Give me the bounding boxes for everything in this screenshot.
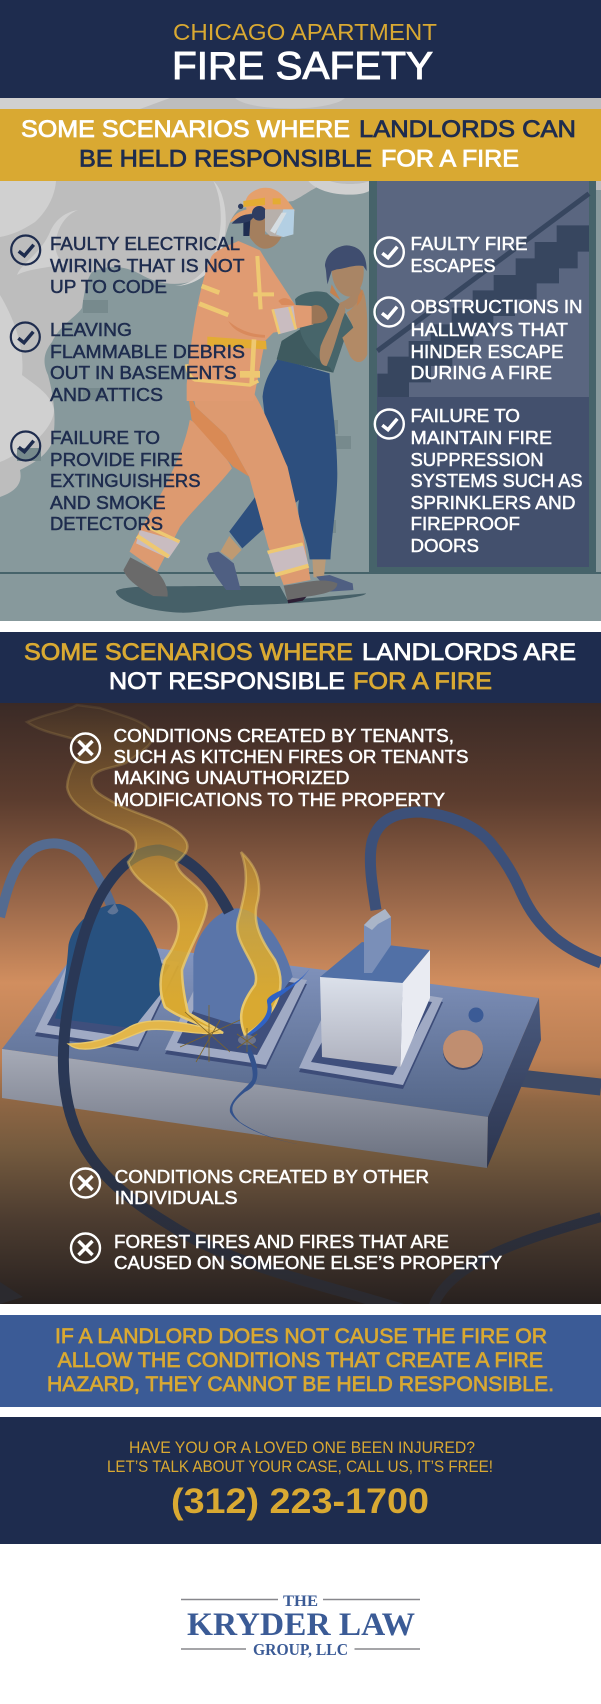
navy heading banner: SOME SCENARIOS WHERE: [24, 639, 353, 666]
gold heading banner: SOME SCENARIOS WHERE: [21, 116, 350, 143]
logo: The Kryder Law Group: THE: [283, 1593, 318, 1610]
figure: firefighter: [123, 188, 337, 603]
item: obstructions: [374, 296, 582, 383]
item: fire escapes: FAULTY FIRE: [410, 233, 528, 254]
item: extinguishers: FAILURE TO: [50, 427, 160, 448]
logo: The Kryder Law Group: [181, 1593, 420, 1659]
icon: x mark: [71, 1234, 100, 1262]
gold heading banner: FOR A FIRE: [381, 146, 519, 172]
stairs: [377, 194, 589, 397]
callout: blue conclusion band: IF A LANDLORD DOES NOT CAUSE THE FIRE OR: [55, 1325, 547, 1348]
item: obstructions: HINDER ESCAPE: [410, 341, 564, 362]
item: flammable debris: OUT IN BASEMENTS: [50, 362, 236, 383]
icon: check: [11, 236, 40, 264]
item: extinguishers: PROVIDE FIRE: [50, 449, 183, 470]
list item: tenant conditions: MAKING UNAUTHORIZED: [114, 767, 350, 788]
list item: other individuals: CONDITIONS CREATED BY OTHER: [115, 1166, 429, 1187]
navy heading banner: NOT RESPONSIBLE: [109, 668, 345, 695]
callout: blue conclusion band: [0, 1315, 601, 1407]
item: flammable debris: AND ATTICS: [50, 384, 163, 405]
list item: forest fires: CAUSED ON SOMEONE ELSE’S PROPERTY: [114, 1252, 502, 1273]
header panel: [0, 0, 601, 98]
item: suppression systems: SUPPRESSION: [410, 449, 544, 470]
panel: call to action: HAVE YOU OR A LOVED ONE BEEN INJURED?: [129, 1438, 475, 1457]
item: suppression systems: FIREPROOF: [410, 513, 520, 534]
power strip: [2, 939, 541, 1168]
item: obstructions: HALLWAYS THAT: [410, 319, 568, 340]
large black cord: [63, 850, 420, 1315]
figure: woman: [207, 245, 367, 592]
doorway panel: [369, 181, 596, 573]
icon: check: [374, 298, 404, 326]
right checklist: [374, 233, 582, 556]
item: faulty wiring: WIRING THAT IS NOT: [50, 255, 244, 276]
smoke wisps: [0, 181, 378, 462]
woman legs and shoes: [207, 358, 353, 592]
logo: The Kryder Law Group: GROUP, LLC: [253, 1640, 348, 1659]
indicator light: [468, 1008, 484, 1022]
power button: [443, 1030, 483, 1070]
wall bricks: [17, 300, 351, 533]
white plug: [320, 909, 430, 1067]
item: suppression systems: MAINTAIN FIRE: [410, 427, 552, 448]
icon: check: [11, 322, 40, 352]
item: faulty wiring: UP TO CODE: [50, 276, 167, 297]
list item: forest fires: [70, 1232, 502, 1270]
firefighter coat and head: [187, 188, 328, 401]
item: flammable debris: LEAVING: [50, 319, 132, 340]
item: obstructions: OBSTRUCTIONS IN: [410, 296, 582, 317]
item: faulty wiring: FAULTY ELECTRICAL: [50, 233, 240, 254]
item: flammable debris: [11, 319, 245, 405]
smoke background: [0, 98, 601, 621]
list item: tenant conditions: SUCH AS KITCHEN FIRES OR TENANTS: [114, 746, 469, 767]
list item: tenant conditions: [71, 725, 469, 810]
item: suppression systems: [375, 405, 582, 556]
list item: tenant conditions: CONDITIONS CREATED BY TENANTS,: [114, 725, 454, 746]
item: extinguishers: DETECTORS: [50, 513, 163, 534]
item: suppression systems: DOORS: [410, 535, 479, 556]
icon: check: [375, 238, 404, 266]
melted plugs: [55, 903, 293, 1028]
phone number: (312) 223-1700: [171, 1482, 429, 1521]
left checklist: [11, 233, 245, 534]
callout: blue conclusion band: ALLOW THE CONDITIONS THAT CREATE A FIRE: [58, 1349, 543, 1372]
panel: call to action: LET’S TALK ABOUT YOUR CASE, CALL US, IT’S FREE!: [107, 1457, 493, 1476]
navy heading banner: LANDLORDS ARE: [362, 639, 576, 666]
socket two: [165, 978, 307, 1069]
title line one: CHICAGO APARTMENT: [173, 19, 437, 45]
item: extinguishers: EXTINGUISHERS: [50, 470, 200, 491]
list item: other individuals: [70, 1167, 429, 1204]
flames: [27, 705, 280, 1049]
background cords: [0, 812, 601, 1315]
gold heading banner: BE HELD RESPONSIBLE: [79, 146, 372, 172]
item: faulty wiring: [11, 233, 244, 297]
title line two: FIRE SAFETY: [172, 45, 433, 88]
panel: landlord not responsible scene: [0, 703, 601, 1315]
item: flammable debris: FLAMMABLE DEBRIS: [50, 341, 245, 362]
wall and floor: [0, 186, 601, 621]
ground shadow: [116, 586, 366, 613]
panel: landlord responsible scene: [0, 98, 601, 621]
frayed wires and sparks: [180, 968, 310, 1144]
icon: check: [375, 410, 404, 438]
logo: The Kryder Law Group: KRYDER LAW: [187, 1607, 415, 1643]
item: obstructions: DURING A FIRE: [410, 362, 552, 383]
item: fire escapes: [375, 233, 528, 276]
item: suppression systems: SYSTEMS SUCH AS: [410, 470, 582, 491]
navy heading banner: FOR A FIRE: [353, 668, 492, 695]
floor line: [0, 572, 601, 574]
item: suppression systems: SPRINKLERS AND: [410, 492, 576, 513]
icon: check: [11, 432, 40, 460]
socket three: [299, 981, 443, 1089]
list item: tenant conditions: MODIFICATIONS TO THE PROPERTY: [114, 789, 445, 810]
panel: call to action: [0, 1417, 601, 1544]
icon: x mark: [71, 1168, 100, 1198]
firefighter legs and boots: [123, 387, 337, 603]
item: extinguishers: AND SMOKE: [50, 492, 166, 513]
item: fire escapes: ESCAPES: [410, 255, 496, 276]
gold heading banner: [0, 109, 601, 181]
item: extinguishers: [11, 427, 201, 534]
icon: x mark: [71, 734, 100, 762]
list item: other individuals: INDIVIDUALS: [115, 1187, 238, 1208]
socket one: [35, 959, 164, 1051]
gold heading banner: LANDLORDS CAN: [359, 116, 576, 143]
list item: forest fires: FOREST FIRES AND FIRES THAT ARE: [114, 1231, 449, 1252]
callout: blue conclusion band: HAZARD, THEY CANNOT BE HELD RESPONSIBLE.: [47, 1373, 554, 1396]
navy heading banner: [0, 632, 601, 703]
woman torso and head: [277, 245, 367, 373]
item: suppression systems: FAILURE TO: [410, 405, 520, 426]
